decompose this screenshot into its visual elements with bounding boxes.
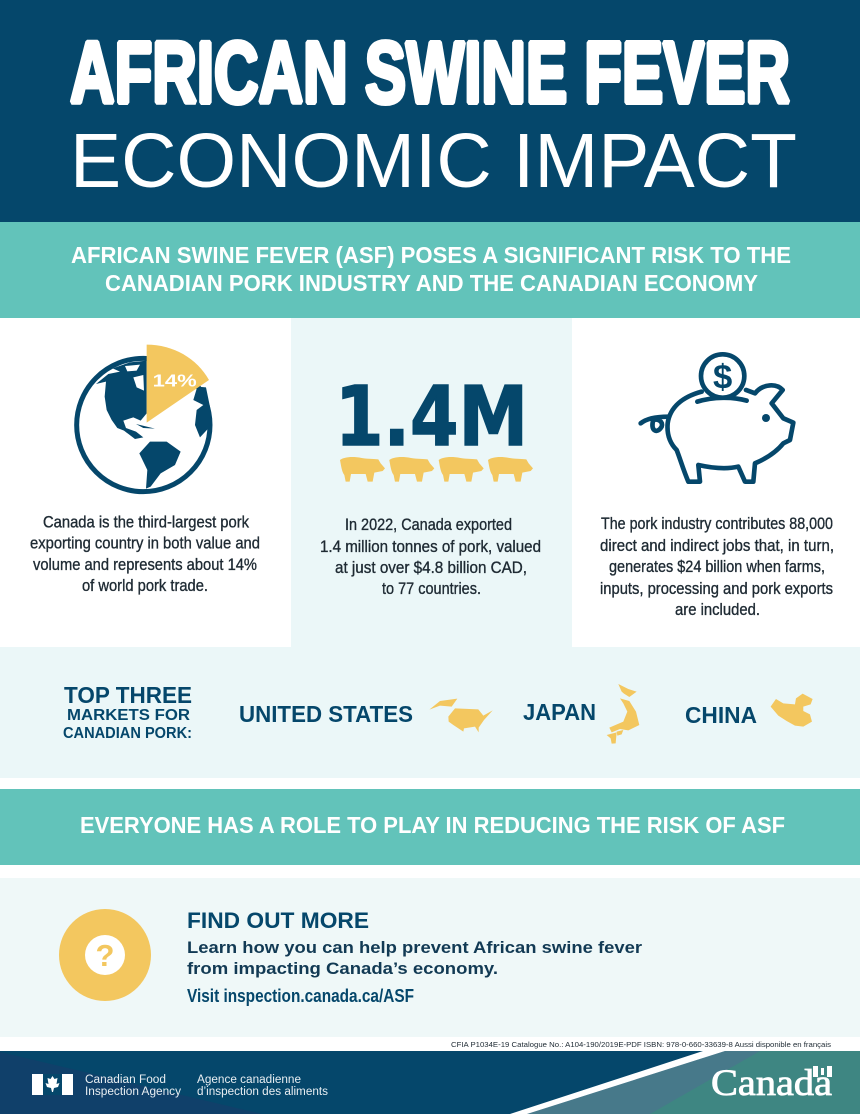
panel: top three markets [0, 647, 860, 778]
icon: piggy bank with coin [641, 354, 793, 482]
heading: find out more: FIND OUT MORE [187, 908, 369, 933]
heading: top three markets: TOP THREE [64, 682, 192, 708]
catalogue line: CFIA P1034E-19 Catalogue No.: A104-190/2019E-PDF ISBN: 978-0-660-33639-8 Aussi disponible en français [451, 1040, 831, 1049]
agency name English: Inspection Agency [85, 1086, 181, 1098]
panel: 1.4M exports [291, 318, 572, 647]
text: export figures: at just over $4.8 billion CAD, [335, 559, 527, 577]
icon: globe with 14 percent wedge: 14% [153, 371, 197, 391]
text: jobs contribution: direct and indirect jobs that, in turn, [600, 537, 834, 555]
market: China [685, 694, 813, 728]
text: third-largest exporter: exporting country in both value and [30, 534, 260, 552]
text: export figures: In 2022, Canada exported [345, 516, 512, 534]
text: prevention message: from impacting Canada’s economy. [187, 959, 498, 978]
link: visit website: Visit inspection.canada.ca/ASF [187, 986, 414, 1006]
panel: jobs and economy [600, 354, 834, 619]
market: United States [239, 699, 493, 732]
text: jobs contribution: generates $24 billion when farms, [609, 558, 825, 576]
text: prevention message [187, 938, 642, 978]
heading: top three markets [63, 682, 192, 742]
agency name French [197, 1074, 328, 1098]
heading: top three markets: MARKETS FOR [67, 707, 190, 724]
footer [0, 1051, 860, 1114]
agency name English [85, 1074, 181, 1098]
heading: top three markets: CANADIAN PORK: [63, 725, 192, 742]
text: jobs contribution [600, 515, 834, 619]
panel: world pork trade [30, 345, 260, 595]
panel: find out more [0, 878, 860, 1037]
icon: row of four pigs [340, 457, 533, 482]
agency name French: Agence canadienne [197, 1074, 301, 1086]
big number 1.4M: 1.4M [335, 370, 528, 465]
text: export figures [320, 516, 541, 598]
market: China: CHINA [685, 702, 757, 728]
icon: piggy bank with coin: $ [713, 358, 732, 396]
icon: question mark [59, 909, 151, 1001]
banner: everyone has a role [0, 789, 860, 865]
text: third-largest exporter: of world pork trade. [82, 577, 208, 595]
text: third-largest exporter [30, 514, 260, 595]
banner: everyone has a role: EVERYONE HAS A ROLE TO PLAY IN REDUCING THE RISK OF ASF [80, 812, 785, 838]
logo: Canadian flag signature [32, 1074, 73, 1095]
icon: globe with 14 percent wedge [77, 345, 211, 492]
text: export figures: 1.4 million tonnes of pork, valued [320, 538, 541, 556]
text: prevention message: Learn how you can help prevent African swine fever [187, 938, 642, 957]
banner: ASF risk statement: CANADIAN PORK INDUSTRY AND THE CANADIAN ECONOMY [105, 270, 758, 296]
banner: ASF risk statement [0, 222, 860, 318]
title header [0, 0, 860, 222]
icon: question mark: ? [96, 938, 114, 973]
title header: ECONOMIC IMPACT [70, 118, 797, 204]
text: third-largest exporter: volume and represents about 14% [33, 556, 257, 574]
text: export figures: to 77 countries. [382, 580, 481, 598]
logo: Canada wordmark: Canada [711, 1063, 832, 1104]
market: Japan [523, 684, 639, 744]
market: United States: UNITED STATES [239, 701, 413, 727]
text: jobs contribution: are included. [675, 601, 760, 619]
market: Japan: JAPAN [523, 699, 596, 725]
agency name French: d’inspection des aliments [197, 1086, 328, 1098]
text: third-largest exporter: Canada is the third-largest pork [43, 514, 250, 532]
agency name English: Canadian Food [85, 1074, 166, 1086]
banner: ASF risk statement: AFRICAN SWINE FEVER (ASF) POSES A SIGNIFICANT RISK TO THE [71, 242, 791, 268]
text: jobs contribution: inputs, processing and pork exports [600, 580, 833, 598]
